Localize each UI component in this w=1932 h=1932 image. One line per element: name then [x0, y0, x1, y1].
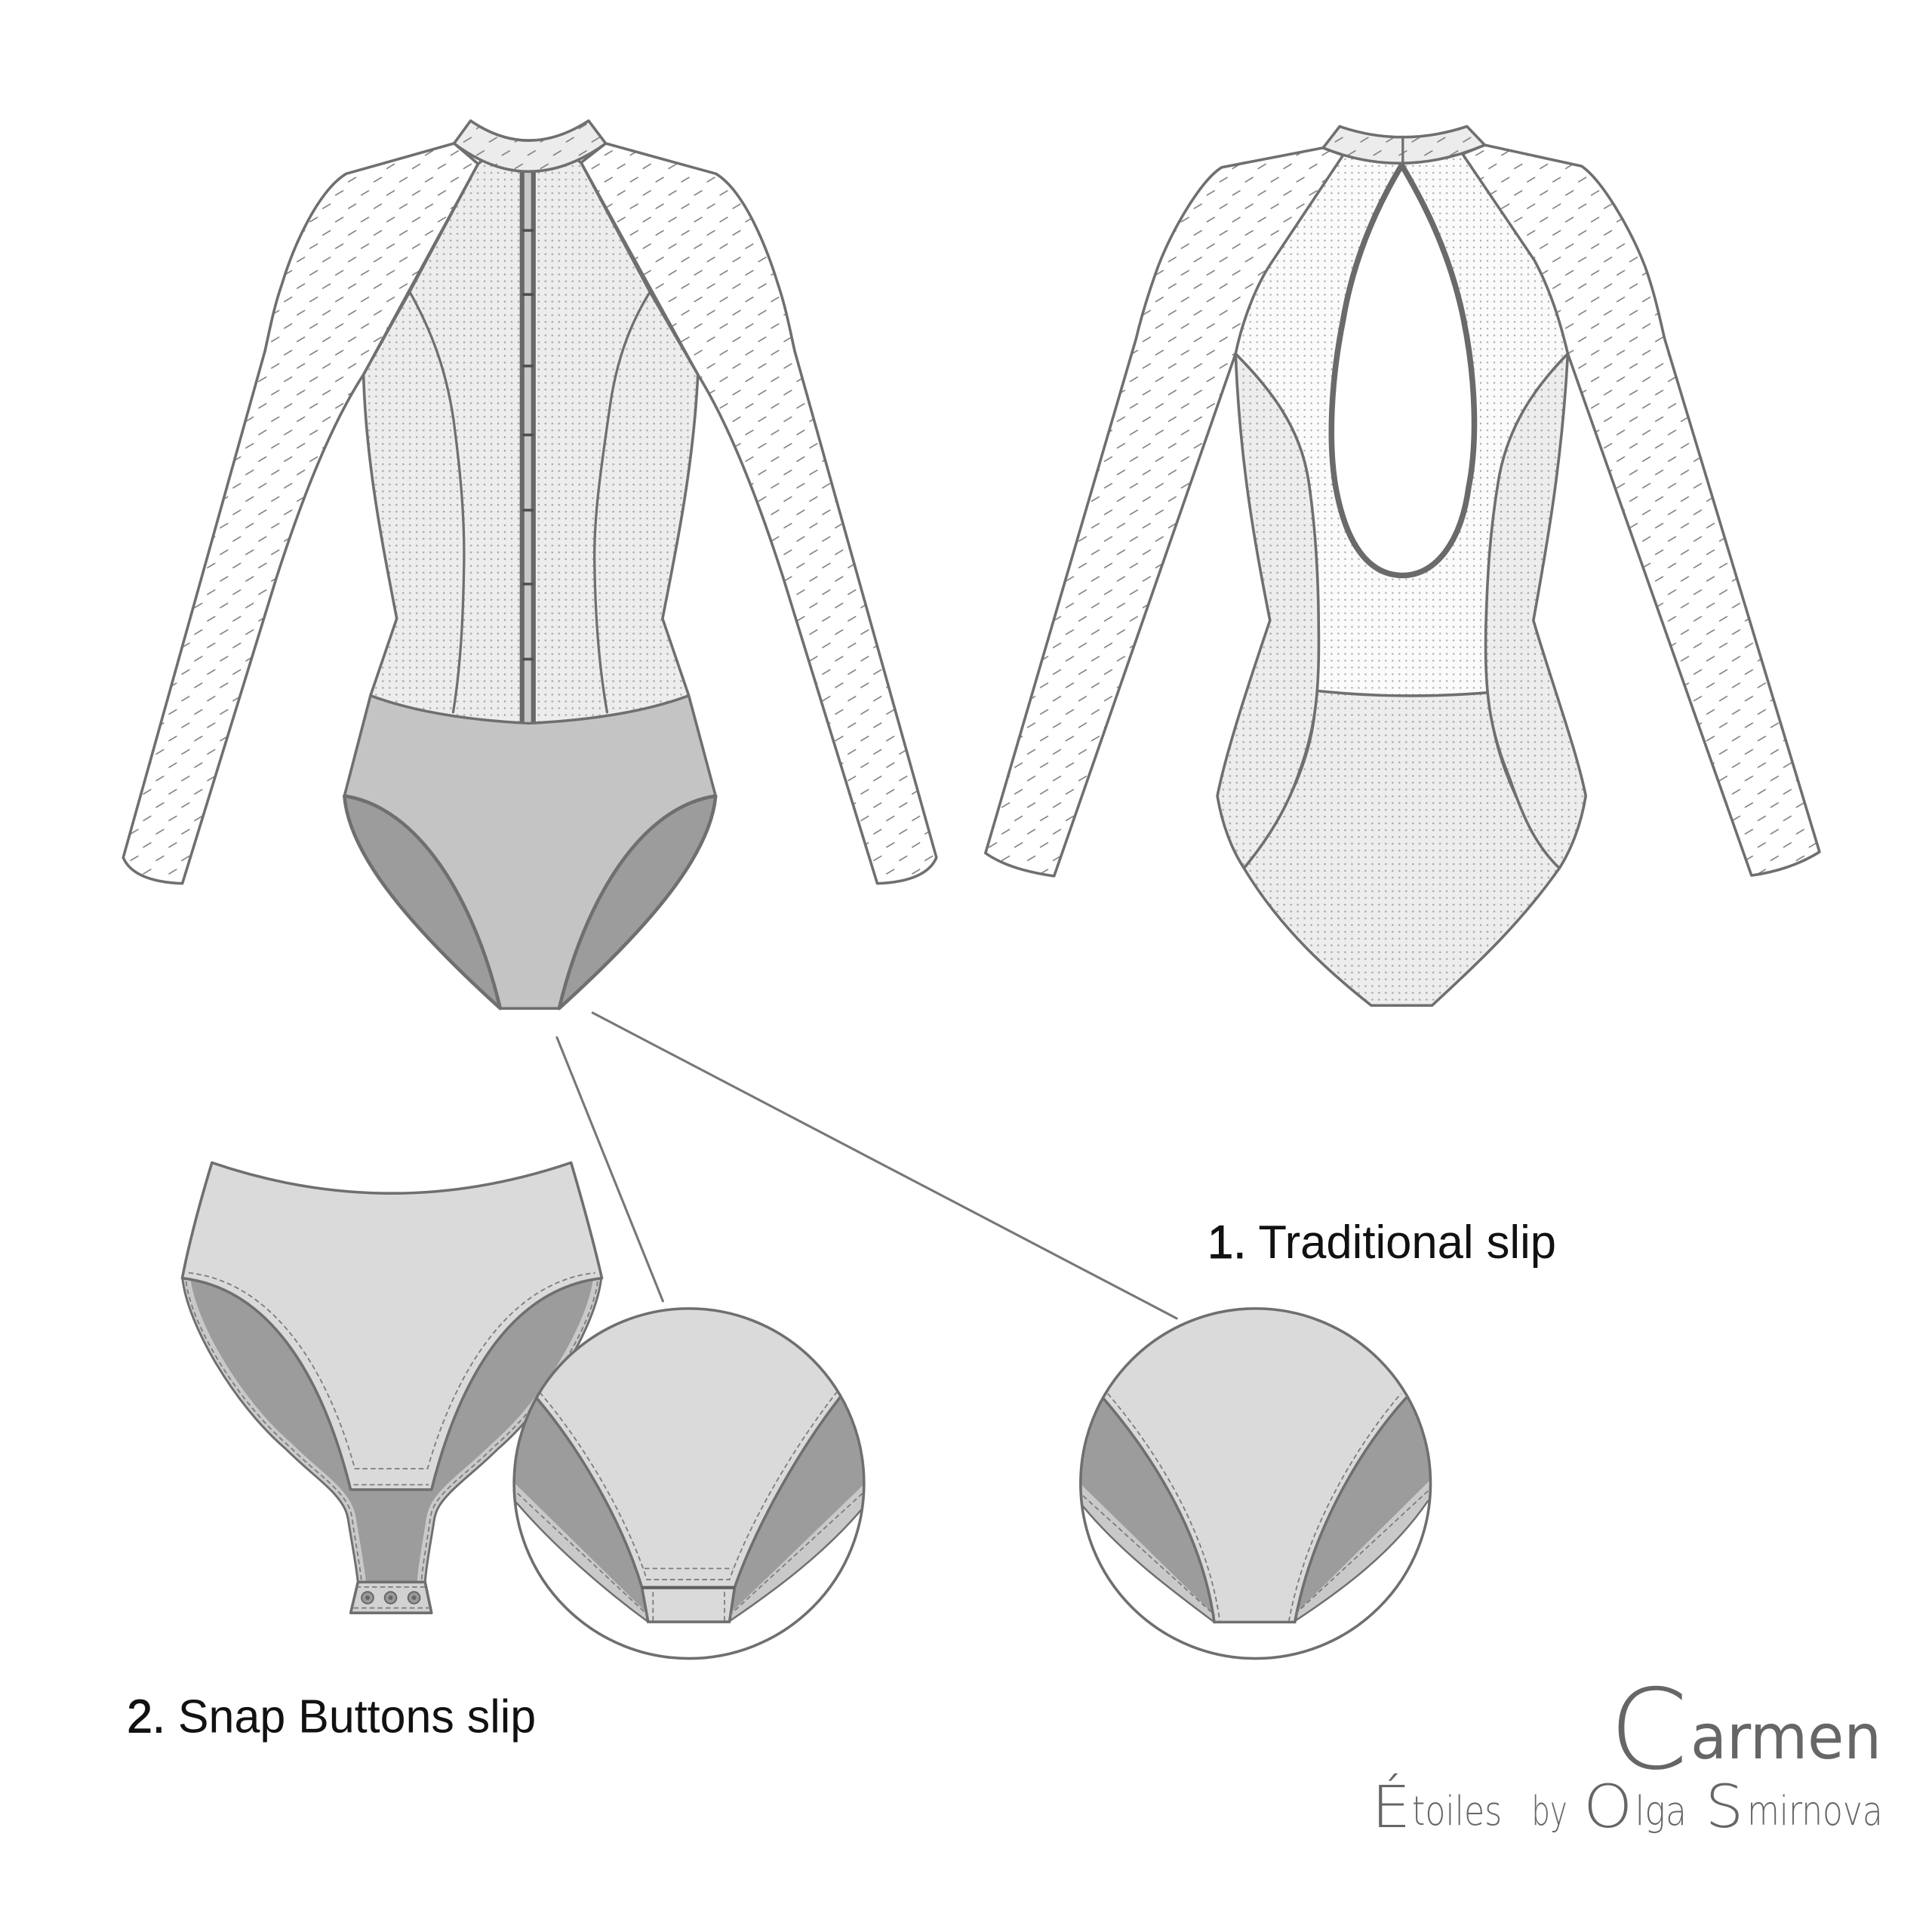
back collar — [1323, 127, 1484, 163]
back left side panel — [1217, 354, 1318, 868]
back bodice keyhole — [1331, 165, 1474, 575]
right leg panel — [559, 796, 715, 1008]
band stitching — [354, 1587, 429, 1608]
slip side stitching — [186, 1281, 361, 1582]
back view garment — [986, 127, 1820, 1005]
detail circle: traditional slip — [1079, 1307, 1432, 1660]
label: snap buttons slip: 2. Snap Buttons slip — [127, 1691, 536, 1743]
connector line to snap buttons detail — [557, 1038, 663, 1301]
back upper mesh panel — [1235, 142, 1567, 703]
front collar — [454, 121, 606, 171]
logo: Étoiles by Olga Smirnova: É — [1371, 1774, 1411, 1841]
band edge stitching — [518, 1494, 863, 1615]
front placket with hooks — [520, 171, 536, 722]
detail circle: snap buttons slip — [512, 1307, 866, 1660]
front view garment — [123, 121, 937, 1008]
label: traditional slip: 1. Traditional slip — [1208, 1217, 1556, 1269]
front torso mesh — [364, 143, 698, 733]
logo: Étoiles by Olga Smirnova: toiles — [1412, 1787, 1502, 1835]
crotch stitching — [354, 1484, 429, 1485]
snap button center — [385, 1592, 396, 1604]
logo: Étoiles by Olga Smirnova: lga — [1635, 1787, 1687, 1835]
snap button left — [361, 1592, 374, 1604]
inner stitching — [1108, 1394, 1401, 1622]
slip silhouette and side binding — [184, 1280, 600, 1580]
logo: Carmen: armen — [1690, 1702, 1881, 1774]
snap seam — [641, 1586, 735, 1589]
back collar seam — [1402, 137, 1404, 164]
back right sleeve — [1463, 145, 1820, 875]
back left sleeve — [986, 148, 1343, 876]
crotch stitching — [645, 1568, 733, 1622]
back right side panel — [1486, 354, 1586, 868]
slip side stitching right — [421, 1281, 598, 1582]
back lower panel — [1244, 691, 1559, 1005]
slip outline — [183, 1278, 601, 1613]
connector line to traditional slip detail — [592, 1013, 1177, 1318]
snap button right — [408, 1592, 420, 1604]
snap band — [351, 1582, 432, 1613]
slip front stitching — [189, 1273, 595, 1469]
band edge stitching — [1083, 1491, 1428, 1615]
front left sleeve — [123, 143, 478, 884]
logo: Étoiles by Olga Smirnova: S — [1706, 1773, 1743, 1841]
snap buttons slip flat view — [173, 1163, 616, 1626]
left leg panel — [344, 796, 500, 1008]
front right sleeve — [581, 143, 937, 884]
inner stitching — [540, 1392, 837, 1580]
front princess seam left — [410, 292, 464, 712]
logo: Carmen: C — [1609, 1666, 1688, 1795]
logo: Étoiles by Olga Smirnova — [1371, 1773, 1883, 1841]
logo: Étoiles by Olga Smirnova: O — [1583, 1773, 1632, 1841]
logo: Étoiles by Olga Smirnova: mirnova — [1747, 1787, 1883, 1835]
logo: Étoiles by Olga Smirnova: by — [1531, 1787, 1567, 1835]
logo: Carmen — [1609, 1666, 1881, 1795]
front princess seam right — [595, 292, 650, 712]
front briefs — [344, 696, 715, 1008]
slip front panel — [182, 1163, 602, 1490]
